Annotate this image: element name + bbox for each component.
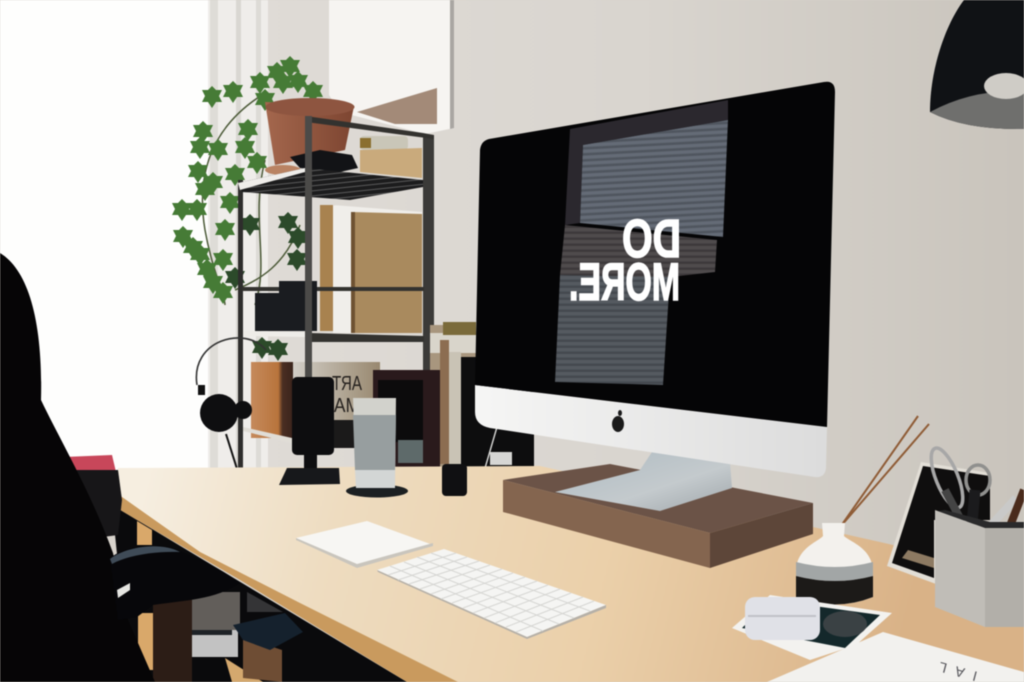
monitor chin bbox=[475, 385, 827, 477]
monitor bbox=[475, 82, 835, 477]
scissors and pens bbox=[925, 444, 1024, 526]
picture frame bbox=[373, 370, 440, 475]
desk bbox=[112, 466, 1024, 682]
bottle and wooden box bbox=[360, 136, 422, 178]
camera lenses bbox=[255, 281, 317, 331]
dark device behind monitor bbox=[461, 357, 534, 475]
monitor screen bbox=[475, 82, 835, 427]
concrete pen holder bbox=[935, 510, 1024, 627]
tray with clips bbox=[732, 595, 892, 660]
lower shelf items bbox=[243, 322, 534, 475]
phone stand bbox=[279, 377, 340, 485]
shelf rails bbox=[242, 116, 434, 342]
flower pot bbox=[265, 98, 354, 175]
plant bbox=[172, 56, 323, 361]
shelf back rail and uprights bbox=[238, 135, 434, 475]
mirrored text: DO MORE.: DO bbox=[622, 209, 681, 269]
apple logo bbox=[612, 410, 624, 432]
art bag: MA bbox=[333, 395, 360, 417]
under desk storage bbox=[192, 592, 303, 682]
window bbox=[0, 0, 214, 480]
chair body bbox=[0, 253, 155, 682]
window reflection in screen bbox=[555, 100, 728, 385]
wood riser bbox=[503, 464, 813, 568]
under desk background bbox=[112, 505, 407, 682]
incense vase bbox=[796, 416, 929, 604]
art bag: ART bbox=[332, 373, 362, 395]
headphones bbox=[196, 338, 266, 472]
black fabric bbox=[290, 150, 358, 172]
chair arm bbox=[110, 545, 240, 620]
plant leaves bbox=[172, 56, 323, 304]
lower shelf plank bbox=[243, 427, 360, 450]
trackpad bbox=[296, 521, 433, 568]
notebooks bbox=[242, 205, 424, 333]
plant stems bbox=[202, 95, 300, 305]
monitor stand bbox=[555, 452, 732, 511]
chair bbox=[0, 253, 240, 682]
glass of water bbox=[346, 398, 408, 498]
curtain bbox=[208, 0, 268, 476]
paper on desk bbox=[767, 632, 1024, 682]
desk leg bbox=[137, 521, 192, 682]
copper planter bbox=[251, 362, 293, 438]
wall bbox=[265, 0, 1024, 570]
red bag bbox=[64, 455, 122, 540]
pen cup bbox=[442, 464, 467, 496]
wall picture bbox=[329, 0, 454, 134]
magazine stack bbox=[430, 322, 476, 475]
desk lamp bbox=[930, 0, 1024, 129]
keyboard bbox=[377, 549, 606, 639]
shelf front post bbox=[305, 116, 312, 436]
black card bbox=[887, 462, 990, 584]
mirrored text: DO MORE.: MORE. bbox=[569, 253, 680, 312]
wire shelf bbox=[238, 168, 423, 200]
art bag bbox=[292, 362, 380, 434]
desk front edge bbox=[112, 490, 458, 682]
mirrored text: DO MORE. bbox=[569, 209, 681, 312]
